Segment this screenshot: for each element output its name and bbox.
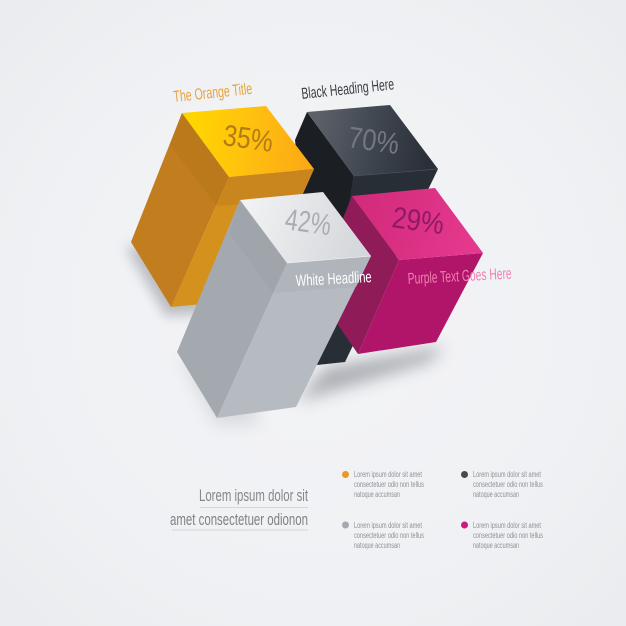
black left face — [295, 112, 354, 365]
title: orange: The Orange Title — [173, 81, 253, 106]
title: white: White Headline — [295, 269, 372, 290]
black top face — [307, 105, 438, 176]
lead line one: Lorem ipsum dolor sit — [199, 486, 308, 505]
black right face — [317, 169, 438, 365]
orange top face — [182, 106, 314, 177]
white top face — [240, 192, 371, 263]
black value: 70% — [346, 121, 401, 161]
lead text — [170, 486, 308, 530]
legend item: magenta: Lorem ipsum dolor sit amet — [473, 521, 542, 530]
legend item: white: Lorem ipsum dolor sit amet — [354, 521, 423, 530]
orange left face — [131, 113, 229, 307]
legend item: magenta: natoque accumsan — [473, 541, 519, 550]
magenta top face — [352, 188, 483, 260]
legend item: orange: natoque accumsan — [354, 490, 400, 499]
legend item: black — [461, 470, 543, 499]
legend item: black: natoque accumsan — [473, 490, 519, 499]
legend item: black: Lorem ipsum dolor sit amet — [473, 470, 542, 479]
block shadows — [125, 246, 445, 426]
magenta right face — [358, 253, 483, 354]
legend item: black: consectetuer odio non tellus — [473, 480, 543, 489]
white value: 42% — [283, 203, 333, 242]
title: black: Black Heading Here — [301, 76, 395, 103]
white left face — [177, 200, 287, 418]
bar: white — [177, 192, 371, 418]
magenta left face — [330, 196, 399, 354]
orange value: 35% — [221, 119, 275, 159]
legend item: orange: Lorem ipsum dolor sit amet — [354, 470, 423, 479]
magenta value: 29% — [390, 201, 446, 241]
lead line two: amet consectetuer odionon — [170, 510, 308, 529]
bar: orange — [131, 106, 314, 307]
legend item: magenta: consectetuer odio non tellus — [473, 531, 543, 540]
legend item: white: consectetuer odio non tellus — [354, 531, 424, 540]
white right face — [217, 256, 371, 418]
orange right face — [171, 169, 314, 307]
bar: magenta — [330, 188, 483, 354]
title: purple: Purple Text Goes Here — [407, 266, 512, 288]
legend — [342, 470, 543, 550]
legend item: magenta — [461, 521, 543, 550]
legend item: orange: consectetuer odio non tellus — [354, 480, 424, 489]
legend item: white — [342, 521, 424, 550]
legend item: orange — [342, 470, 424, 499]
bar: black — [295, 105, 438, 365]
legend item: white: natoque accumsan — [354, 541, 400, 550]
